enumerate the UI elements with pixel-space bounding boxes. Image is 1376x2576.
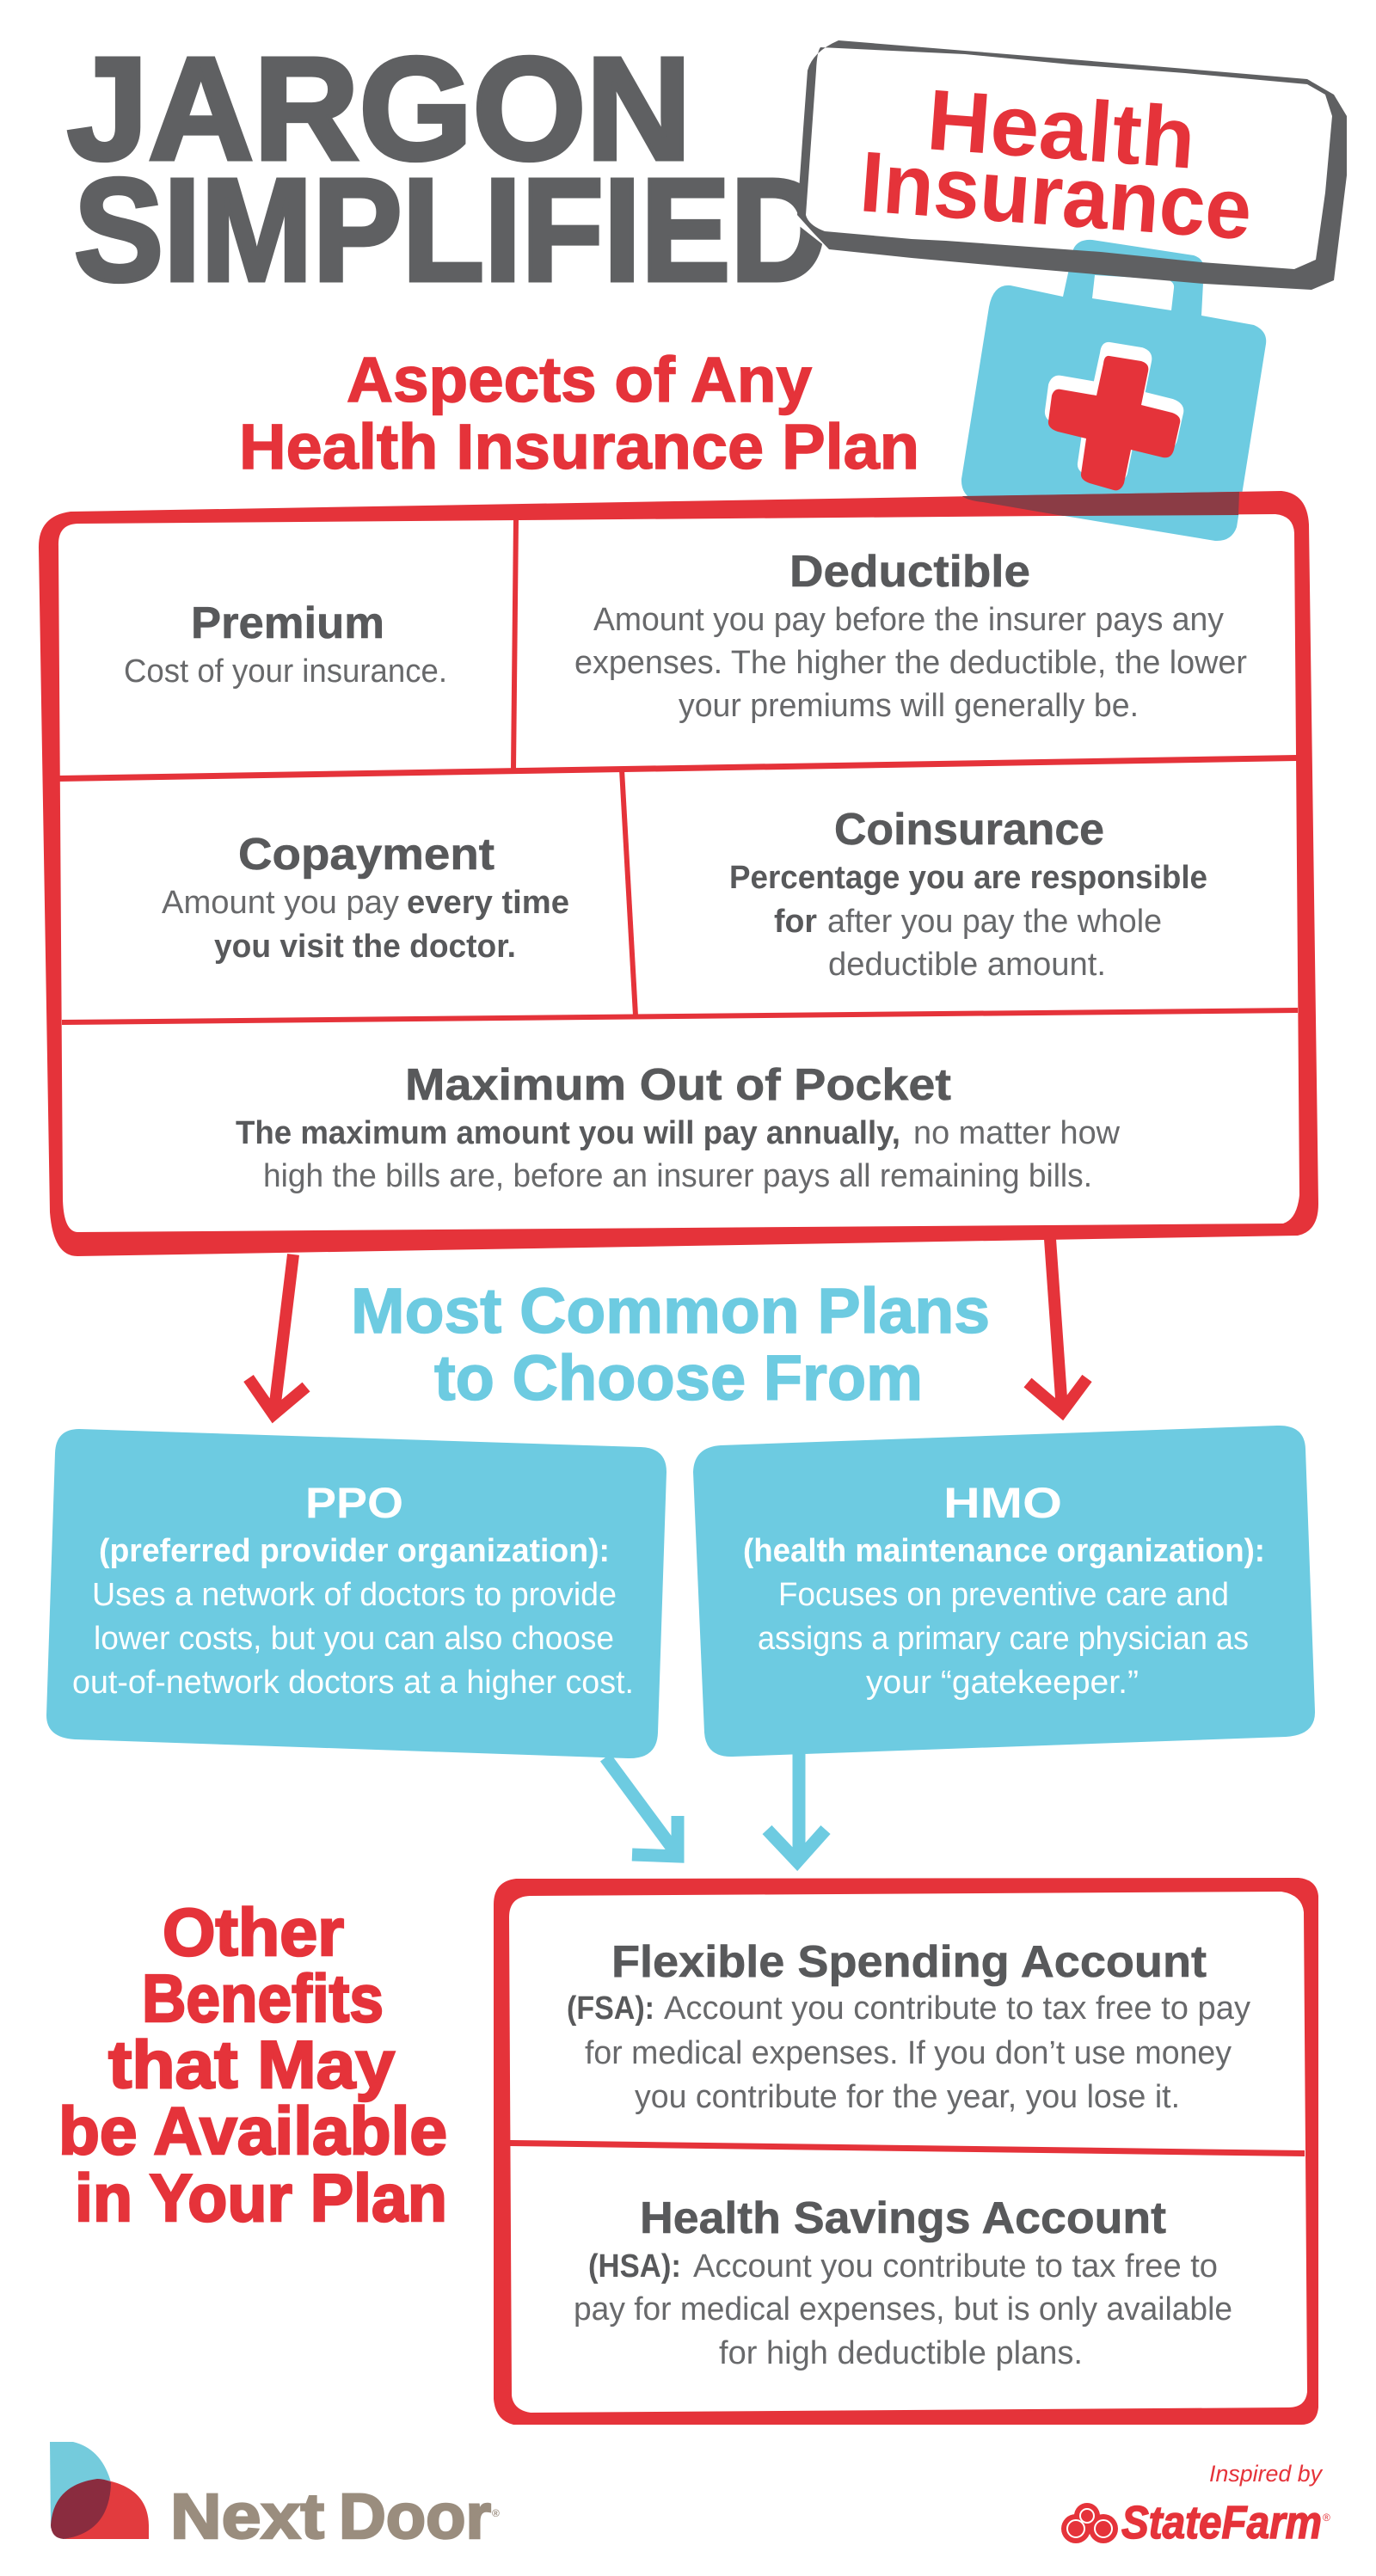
panel: PPO: lower costs, but you can also choose <box>94 1621 614 1657</box>
sign frame <box>797 40 1347 290</box>
cell: Premium <box>124 598 447 690</box>
title: Jargon Simplified <box>67 28 827 312</box>
cell: Maximum Out of Pocket: Maximum Out of Pocket <box>405 1060 951 1110</box>
cell: Copayment: Amount you pay <box>162 885 399 921</box>
sign text: Health Insurance <box>857 71 1255 258</box>
heading: Other Benefits: Benefits <box>142 1960 384 2036</box>
cell: Health Savings Account: pay for medical expenses, but is only available <box>574 2291 1232 2328</box>
sign text: Health Insurance: Health <box>924 71 1199 187</box>
panel: HMO: Focuses on preventive care and <box>778 1577 1229 1613</box>
credit: Inspired by State Farm: Inspired by <box>1209 2461 1323 2487</box>
cell: Flexible Spending Account: for medical expenses. If you don’t use money <box>585 2035 1232 2071</box>
cell: Copayment: you visit the doctor. <box>214 929 516 965</box>
panel: PPO <box>46 1429 666 1758</box>
heading: Most Common Plans to Choose From: to Choose From <box>434 1342 923 1414</box>
cell: Coinsurance: deductible amount. <box>828 947 1106 983</box>
credit: Inspired by State Farm <box>1061 2461 1330 2548</box>
cell: Coinsurance <box>729 805 1207 983</box>
panel frame <box>39 491 1318 1256</box>
panel: PPO: (preferred provider organization): <box>99 1533 610 1569</box>
logo: Next Door <box>50 2442 500 2552</box>
cell: Deductible: Amount you pay before the insurer pays any <box>593 602 1224 638</box>
panel frame <box>494 1878 1318 2425</box>
panel: HMO: HMO <box>943 1479 1062 1527</box>
heading: Other Benefits: that May <box>108 2027 395 2102</box>
arrow: red right <box>1028 1239 1087 1412</box>
cell: Health Savings Account: (HSA): <box>588 2248 681 2285</box>
panel: HMO <box>693 1426 1315 1757</box>
cell: Coinsurance: for <box>774 904 817 940</box>
cell: Premium: Cost of your insurance. <box>124 653 447 690</box>
title: Jargon Simplified: SIMPLIFIED <box>74 149 827 312</box>
cell: Health Savings Account <box>574 2193 1232 2371</box>
sign background <box>797 40 1347 290</box>
heading: Aspects of Any Health Insurance Plan: Aspects of Any <box>347 344 812 415</box>
credit: Inspired by State Farm: ® <box>1323 2512 1330 2524</box>
cell dividers <box>59 519 1298 1025</box>
panel: FSA and HSA <box>494 1878 1318 2425</box>
arrow: red left <box>249 1254 306 1414</box>
cell: Coinsurance: Percentage you are responsible <box>729 860 1207 896</box>
cell: Maximum Out of Pocket <box>236 1060 1121 1194</box>
cell: Copayment <box>162 830 569 965</box>
cell: Copayment: every time <box>407 885 569 921</box>
arrow: blue left <box>605 1757 678 1856</box>
cell: Health Savings Account: for high deductible plans. <box>719 2335 1083 2371</box>
heading: Most Common Plans to Choose From: Most Common Plans <box>351 1275 990 1346</box>
heading: Most Common Plans to Choose From <box>351 1275 990 1414</box>
panel: HMO: assigns a primary care physician as <box>758 1621 1249 1657</box>
logo: State Farm rings <box>1061 2503 1118 2543</box>
cell: Flexible Spending Account <box>567 1937 1250 2115</box>
panel: PPO: out-of-network doctors at a higher cost. <box>72 1665 634 1701</box>
panel: HMO: your “gatekeeper.” <box>866 1665 1139 1701</box>
cell: Deductible: your premiums will generally be. <box>679 688 1139 724</box>
divider <box>510 2140 1305 2156</box>
cell: Copayment: Copayment <box>238 830 494 880</box>
heading: Other Benefits: Other <box>163 1894 344 1970</box>
cell: Flexible Spending Account: Flexible Spending Account <box>611 1937 1207 1987</box>
panel: aspects of a plan <box>39 491 1318 1256</box>
cell: Maximum Out of Pocket: high the bills are, before an insurer pays all remaining bills. <box>263 1158 1092 1194</box>
cell: Health Savings Account: Account you contribute to tax free to <box>693 2248 1218 2285</box>
arrow: blue right <box>767 1754 826 1861</box>
cell: Deductible: Deductible <box>789 547 1030 597</box>
panel: PPO: Uses a network of doctors to provide <box>92 1577 617 1613</box>
logo wordmark: Door <box>339 2481 491 2552</box>
logo wordmark: ® <box>492 2507 500 2519</box>
sign text: Health Insurance: Insurance <box>857 133 1255 258</box>
cell: Premium: Premium <box>191 598 384 648</box>
cell: Flexible Spending Account: (FSA): <box>567 1990 654 2027</box>
logo wordmark <box>170 2481 500 2552</box>
cell: Maximum Out of Pocket: no matter how <box>913 1115 1121 1151</box>
cell: Flexible Spending Account: you contribute for the year, you lose it. <box>635 2079 1180 2115</box>
heading: Aspects of Any Health Insurance Plan <box>239 344 919 482</box>
heading: Other Benefits <box>58 1894 447 2236</box>
credit: Inspired by State Farm: StateFarm <box>1121 2497 1322 2548</box>
cell: Flexible Spending Account: Account you contribute to tax free to pay <box>664 1990 1250 2027</box>
heading: Other Benefits: in Your Plan <box>75 2160 447 2236</box>
logo mark <box>50 2442 149 2539</box>
panel: PPO: PPO <box>305 1479 403 1527</box>
heading: Aspects of Any Health Insurance Plan: Health Insurance Plan <box>239 411 919 482</box>
heading: Other Benefits: be Available <box>58 2093 447 2168</box>
cell: Deductible <box>574 547 1247 724</box>
icon: medical bag <box>961 240 1266 541</box>
cell: Health Savings Account: Health Savings Account <box>640 2193 1166 2243</box>
logo wordmark: Next <box>170 2481 324 2552</box>
cell: Deductible: expenses. The higher the deductible, the lower <box>574 645 1247 681</box>
cell: Coinsurance: after you pay the whole <box>827 904 1162 940</box>
cell: Maximum Out of Pocket: The maximum amount you will pay annually, <box>236 1115 900 1151</box>
panel: HMO: (health maintenance organization): <box>743 1533 1265 1569</box>
cell: Coinsurance: Coinsurance <box>834 805 1104 855</box>
title: Jargon Simplified: JARGON <box>67 28 691 191</box>
bag overlap on frame <box>962 492 1239 516</box>
